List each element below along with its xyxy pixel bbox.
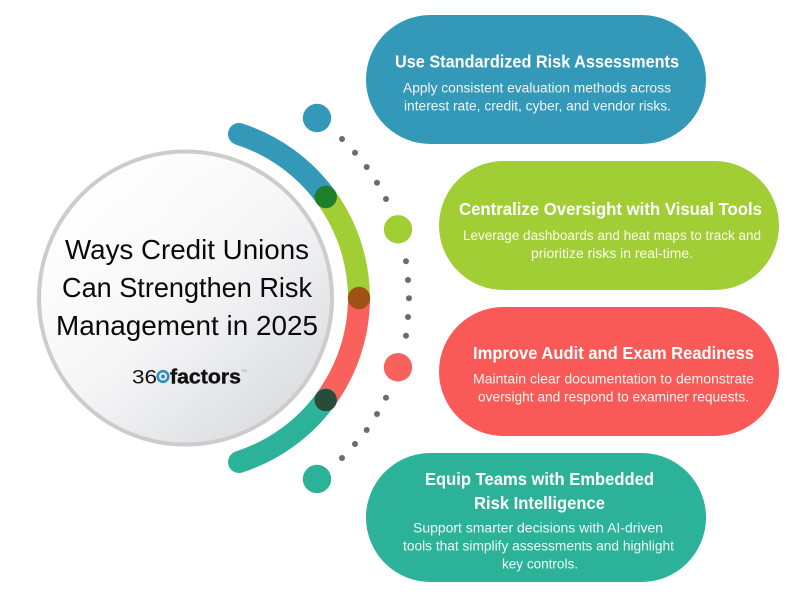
panel: centralize oversight: prioritize risks in real-time. [531,246,693,261]
panel: centralize oversight: Centralize Oversight with Visual Tools [459,199,762,219]
logo: 36Qfactors: factors [170,366,241,388]
panel: standardized risk assessments: Use Standardized Risk Assessments [395,52,679,72]
panel: embedded risk intelligence: Equip Teams with Embedded [425,469,654,489]
arc junction: dark teal [314,389,337,411]
panel: audit and exam readiness: Maintain clear documentation to demonstrate [473,372,754,387]
panel: centralize oversight: Leverage dashboards and heat maps to track and [463,228,761,243]
panel: standardized risk assessments: Apply consistent evaluation methods across [403,81,671,96]
panel: standardized risk assessments [366,15,706,144]
title: Management in 2025 [56,310,318,341]
title [56,234,318,341]
arc: blue [239,134,326,197]
central circle [39,152,332,444]
connector dots [339,136,412,461]
title: Ways Credit Unions [65,234,309,265]
arc ring [239,134,359,462]
logo: 36Qfactors: 36 [132,368,157,388]
panel: centralize oversight [439,161,779,290]
panel: standardized risk assessments: interest rate, credit, cyber, and vendor risks. [404,99,671,114]
arc: green [326,197,359,298]
panel: embedded risk intelligence: tools that simplify assessments and highlight [403,539,674,554]
panel: audit and exam readiness: Improve Audit and Exam Readiness [473,343,754,363]
node: teal [303,465,331,493]
arc: teal [239,399,326,462]
node: blue [303,104,331,132]
panel: audit and exam readiness: oversight and respond to examiner requests. [478,390,749,405]
arc junction: brown [348,287,370,309]
panel: audit and exam readiness [439,307,779,436]
arc: red [326,298,359,399]
node: red [384,353,412,381]
logo: 36Qfactors [132,366,247,388]
panel: embedded risk intelligence: Support smarter decisions with AI-driven [413,521,663,536]
logo: 36Qfactors: TM [241,368,247,373]
panel: embedded risk intelligence: key controls. [502,556,578,572]
node: green [384,215,412,244]
arc junction: dark green [314,186,337,208]
title: Can Strengthen Risk [62,272,312,303]
panel: embedded risk intelligence [366,453,706,582]
panel: embedded risk intelligence: Risk Intelligence [474,493,605,513]
